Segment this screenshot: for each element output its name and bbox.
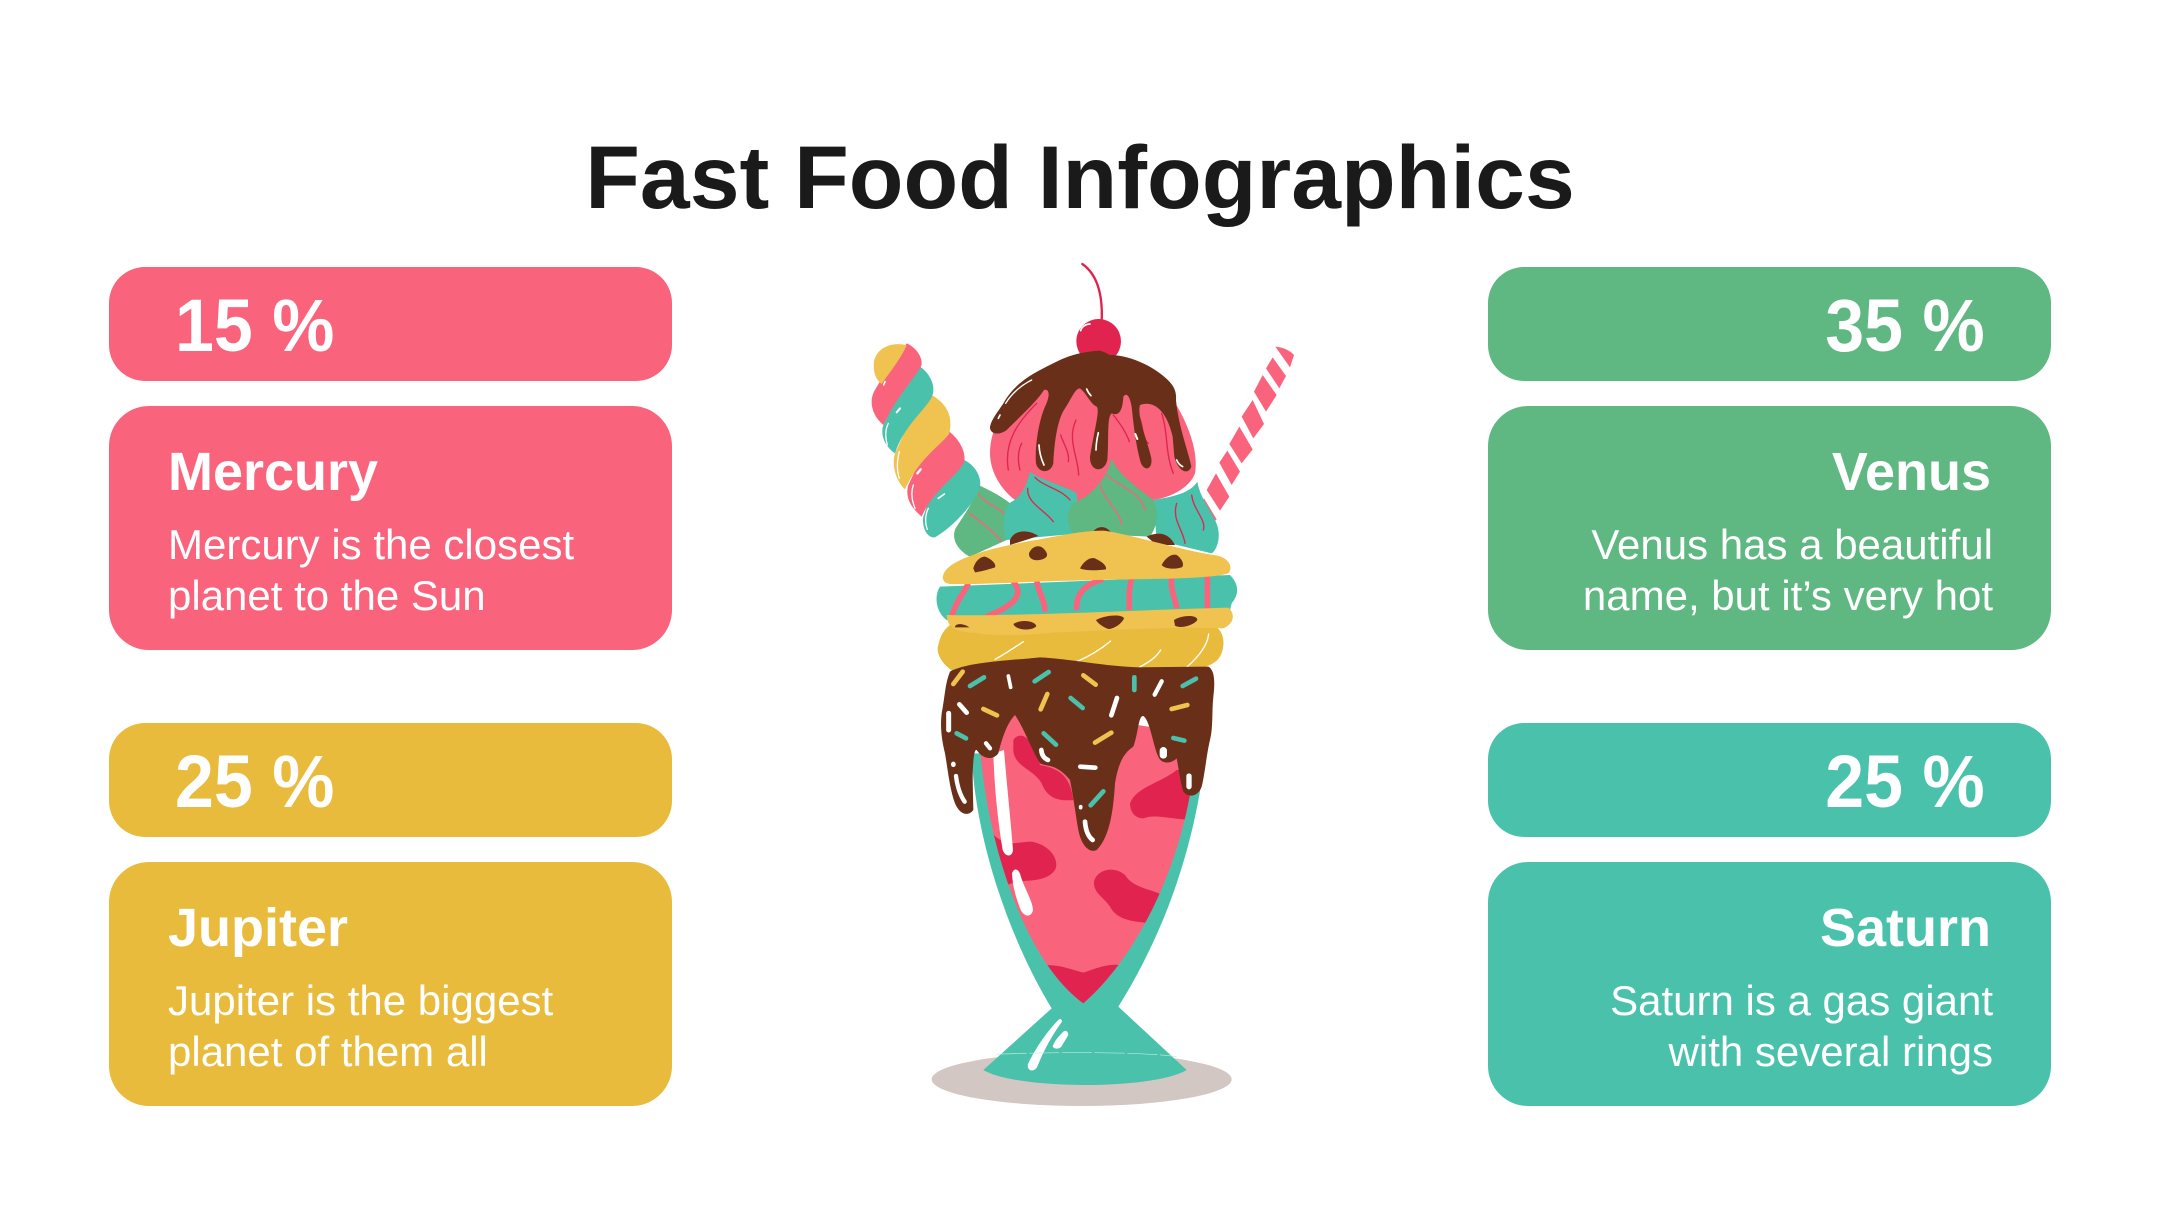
text: Venus description	[1583, 521, 1993, 619]
text: Mercury description: Mercury is the closest	[168, 521, 574, 568]
title: Fast Food Infographics	[585, 127, 1575, 227]
icon: cookie and cream layers	[937, 527, 1237, 673]
percent pill: Venus	[1488, 267, 2051, 381]
percent pill: Saturn: 25 %	[1826, 740, 1985, 823]
text: Saturn description: with several rings	[1669, 1028, 1993, 1075]
illustration: milkshake sundae	[872, 262, 1294, 1106]
text: Venus description: Venus has a beautiful	[1591, 521, 1993, 568]
text: Saturn description: Saturn is a gas giant	[1610, 977, 1993, 1024]
text: Mercury description	[168, 521, 574, 619]
panel: Saturn	[1488, 862, 2051, 1106]
icon: glass with shake	[932, 707, 1232, 1106]
percent pill: Jupiter: 25 %	[175, 740, 334, 823]
icon: twisted candy	[872, 343, 980, 537]
text: Jupiter description: Jupiter is the biggest	[168, 977, 553, 1024]
heading: Saturn: Saturn	[1820, 898, 1991, 958]
icon: striped straw	[1202, 347, 1294, 522]
percent pill: Venus: 35 %	[1826, 284, 1985, 367]
text: Jupiter description	[168, 977, 553, 1075]
icon: ice cream scoop and toppings	[954, 351, 1219, 557]
text: Mercury description: planet to the Sun	[168, 572, 486, 619]
panel: Venus	[1488, 406, 2051, 650]
text: Saturn description	[1610, 977, 1993, 1075]
percent pill: Jupiter	[109, 723, 672, 837]
percent pill: Saturn	[1488, 723, 2051, 837]
icon: chocolate drip with sprinkles	[941, 657, 1214, 851]
panel: Mercury	[109, 406, 672, 650]
panel: Jupiter	[109, 862, 672, 1106]
heading: Venus: Venus	[1832, 442, 1991, 502]
heading: Jupiter: Jupiter	[168, 898, 348, 958]
text: Jupiter description: planet of them all	[168, 1028, 488, 1075]
heading: Mercury: Mercury	[168, 442, 378, 502]
percent pill: Mercury: 15 %	[175, 284, 334, 367]
icon: cherry	[1076, 264, 1121, 364]
text: Venus description: name, but it’s very hot	[1583, 572, 1993, 619]
percent pill: Mercury	[109, 267, 672, 381]
